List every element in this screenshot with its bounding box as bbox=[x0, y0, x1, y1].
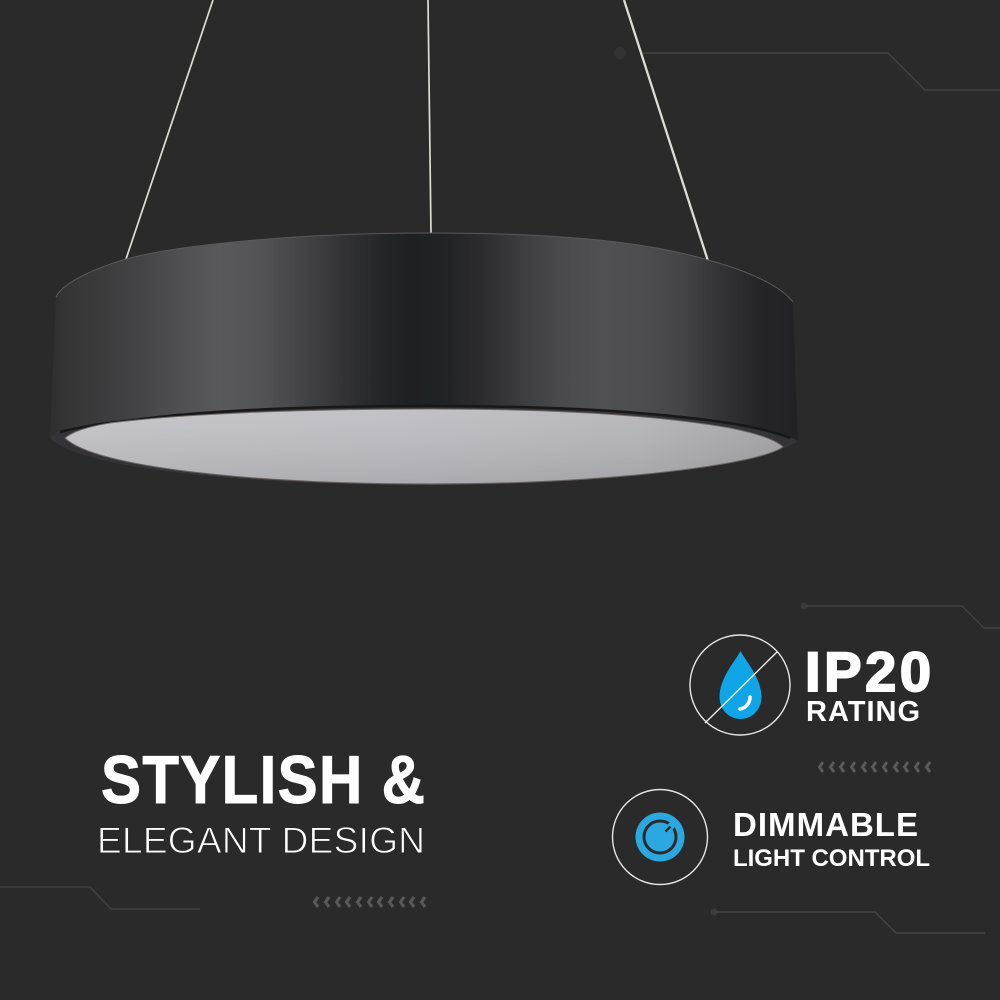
drop highlight bbox=[740, 697, 750, 709]
icon: no water drop bbox=[690, 635, 790, 735]
suspension wires bbox=[125, 0, 708, 262]
chevron row: bottom left bbox=[314, 897, 425, 907]
circuit line: bottom left bbox=[0, 887, 200, 909]
label: IP20 rating bbox=[805, 640, 931, 728]
label: dimmable light control bbox=[733, 806, 930, 872]
knob gap bbox=[669, 823, 674, 828]
dimmable: DIMMABLE bbox=[733, 806, 918, 843]
lamp lower rim bbox=[50, 406, 798, 485]
lamp diffuser bbox=[65, 409, 783, 484]
knob tick bbox=[666, 826, 670, 832]
rating: RATING bbox=[806, 696, 920, 728]
circuit line: top right bbox=[614, 47, 1000, 90]
lamp top edge highlight bbox=[56, 233, 793, 302]
diffuser shading bbox=[65, 409, 783, 484]
lamp body bbox=[50, 233, 798, 485]
chevron row: right bbox=[820, 762, 930, 772]
circuit line: right middle bbox=[800, 602, 1000, 628]
water drop bbox=[720, 651, 762, 719]
heading line 2: ELEGANT DESIGN bbox=[97, 820, 425, 861]
pendant lamp bbox=[50, 233, 798, 485]
heading line 1: STYLISH & bbox=[101, 742, 425, 818]
knob ring bbox=[644, 821, 676, 853]
heading bbox=[97, 742, 425, 861]
light control: LIGHT CONTROL bbox=[733, 845, 930, 872]
slash bbox=[705, 652, 777, 723]
icon ring bbox=[690, 635, 790, 735]
icon: dimmer knob bbox=[612, 790, 708, 884]
lamp groove bbox=[60, 406, 790, 438]
circuit line: bottom right bbox=[710, 908, 985, 933]
blue disc bbox=[636, 812, 684, 862]
icon ring bbox=[612, 790, 708, 884]
IP20: IP20 bbox=[805, 640, 931, 703]
